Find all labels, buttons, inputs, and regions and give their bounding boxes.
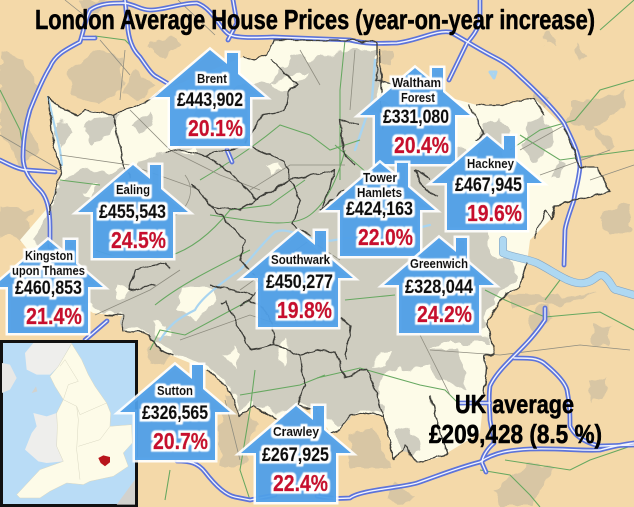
cream gaps in built-up area xyxy=(80,72,392,368)
house: Sutton: 20.7% xyxy=(153,428,208,454)
house: Ealing xyxy=(78,165,188,258)
house: Kingston upon Thames: £460,853 xyxy=(15,277,82,299)
Wales xyxy=(25,413,63,463)
built-up grey area xyxy=(34,48,567,456)
house: Tower Hamlets: Hamlets xyxy=(357,185,402,200)
callout: UK average xyxy=(429,389,602,449)
house: Southwark: 19.8% xyxy=(277,297,332,323)
house: Southwark xyxy=(243,231,353,327)
house: Crawley: 22.4% xyxy=(273,470,328,496)
house: Tower Hamlets: £424,163 xyxy=(346,198,413,220)
house: Ealing: 24.5% xyxy=(111,227,166,253)
inset map: UK locator xyxy=(2,342,136,506)
house: Crawley: £267,925 xyxy=(262,444,329,466)
house: Hackney: 19.6% xyxy=(467,200,522,226)
house: Crawley xyxy=(241,406,351,502)
house: Waltham Forest: Forest xyxy=(401,90,436,105)
callout: UK average: UK average xyxy=(455,389,574,419)
house: Ealing: £455,543 xyxy=(99,201,166,223)
house: Tower Hamlets: Tower xyxy=(363,170,397,185)
house: Sutton: £326,565 xyxy=(142,402,208,424)
house: Waltham Forest: 20.4% xyxy=(394,132,449,158)
house: Brent: £443,902 xyxy=(177,89,243,111)
Ireland xyxy=(2,363,17,393)
house: Waltham Forest: £331,080 xyxy=(383,106,449,128)
house: Sutton xyxy=(120,365,230,460)
London area xyxy=(20,40,610,463)
house: Greenwich: 24.2% xyxy=(417,301,472,327)
house: Sutton: Sutton xyxy=(157,383,193,398)
house: Hackney: £467,945 xyxy=(455,174,522,196)
callout: UK average: £209,428 (8.5 %) xyxy=(429,419,602,449)
house: Greenwich: £328,044 xyxy=(405,276,473,298)
house: Kingston upon Thames xyxy=(0,240,103,333)
house: Crawley: Crawley xyxy=(273,424,320,439)
house: Hackney: Hackney xyxy=(467,156,515,171)
Greater London marker xyxy=(98,455,110,466)
house: Ealing: Ealing xyxy=(116,182,150,197)
house: Greenwich xyxy=(384,238,494,333)
house: Brent: 20.1% xyxy=(188,115,243,141)
house: Southwark: £450,277 xyxy=(266,271,333,293)
house: Tower Hamlets: 22.0% xyxy=(358,224,413,250)
house: Kingston upon Thames: Kingston xyxy=(25,248,73,263)
house: Brent: Brent xyxy=(197,71,228,86)
house: Southwark: Southwark xyxy=(271,252,331,267)
Scotland xyxy=(25,343,72,375)
house: Hackney xyxy=(432,136,542,230)
house: Brent xyxy=(155,50,265,146)
house: Waltham Forest xyxy=(360,68,470,164)
house: Greenwich: Greenwich xyxy=(410,256,468,271)
county and borough boundaries xyxy=(48,40,610,463)
River Thames xyxy=(48,60,634,340)
house: Waltham Forest: Waltham xyxy=(392,75,441,90)
house: Kingston upon Thames: 21.4% xyxy=(26,303,82,329)
house: Tower Hamlets xyxy=(325,163,435,256)
England xyxy=(17,344,132,498)
house: Kingston upon Thames: upon Thames xyxy=(12,263,85,278)
